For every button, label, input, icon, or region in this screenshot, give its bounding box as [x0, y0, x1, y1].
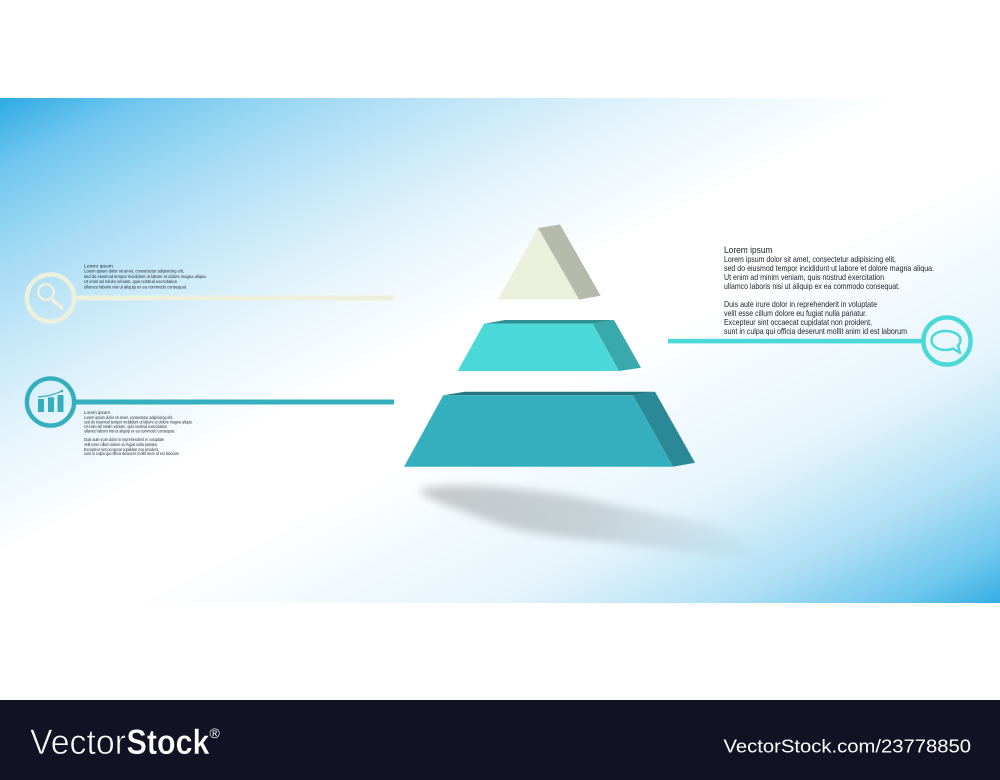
- text block: Ut enim ad minim veniam, quis nostrud exercitation: [84, 279, 177, 285]
- text block: sunt in culpa qui officia deserunt mollit anim id est laborum: [84, 451, 179, 456]
- callout: right: [668, 245, 971, 365]
- text block: Lorem ipsum dolor sit amet, consectetur adipisicing elit,: [84, 415, 173, 420]
- text block: sed do eiusmod tempor incididunt ut labore et dolore magna aliqua.: [84, 420, 193, 424]
- connector line: [668, 339, 922, 343]
- image id: VectorStock.com/23778850: [724, 736, 971, 756]
- text block: Ut enim ad minim veniam, quis nostrud exercitation: [84, 424, 168, 429]
- connector line: [76, 400, 394, 404]
- text block: velit esse cillum dolore eu fugiat nulla pariatur.: [724, 308, 867, 318]
- text block: Excepteur sint occaecat cupidatat non proident,: [724, 317, 872, 327]
- pyramid top segment: [498, 224, 601, 300]
- text block: ullamco laboris nisi ut aliquip ex ea commodo consequat.: [84, 285, 187, 291]
- text block: sed do eiusmod tempor incididunt ut labore et dolore magna aliqua.: [724, 263, 934, 273]
- pyramid middle segment: [458, 320, 641, 371]
- logo: Vector: [30, 723, 126, 762]
- icon: bar chart: [27, 378, 74, 426]
- callout: top left: [27, 264, 394, 322]
- text block: velit esse cillum dolore eu fugiat nulla pariatur.: [84, 442, 158, 447]
- pyramid bottom segment: [404, 392, 695, 467]
- text block: Duis aute irure dolor in reprehenderit in voluptate: [724, 299, 877, 309]
- icon: magnifier: [27, 274, 74, 322]
- text block: Lorem ipsum: [724, 245, 772, 255]
- icon: speech bubble: [923, 317, 971, 365]
- text block: [724, 245, 934, 336]
- text block: [84, 410, 193, 456]
- pyramid shadow: [418, 485, 775, 559]
- text block: [84, 264, 207, 291]
- text block: Lorem ipsum dolor sit amet, consectetur adipisicing elit,: [84, 269, 184, 275]
- logo: Stock: [126, 723, 210, 762]
- text block: Duis aute irure dolor in reprehenderit in voluptate: [84, 437, 165, 442]
- footer bar: [0, 700, 1000, 780]
- logo: [30, 723, 220, 762]
- text block: Lorem ipsum dolor sit amet, consectetur adipisicing elit,: [724, 254, 896, 264]
- text block: ullamco laboris nisi ut aliquip ex ea commodo consequat.: [724, 281, 900, 291]
- text block: Lorem ipsum: [84, 264, 113, 270]
- logo: ®: [210, 725, 220, 741]
- background band: [0, 98, 1000, 603]
- text block: Excepteur sint occaecat cupidatat non proident,: [84, 447, 159, 452]
- callout: bottom left: [27, 378, 394, 456]
- text block: ullamco laboris nisi ut aliquip ex ea commodo consequat.: [84, 428, 175, 434]
- connector line: [76, 296, 394, 300]
- pyramid: [404, 224, 695, 467]
- text block: Ut enim ad minim veniam, quis nostrud exercitation: [724, 272, 884, 282]
- text block: sed do eiusmod tempor incididunt ut labore et dolore magna aliqua.: [84, 274, 207, 280]
- text block: sunt in culpa qui officia deserunt mollit anim id est laborum: [724, 326, 907, 336]
- text block: Lorem ipsum: [84, 410, 110, 415]
